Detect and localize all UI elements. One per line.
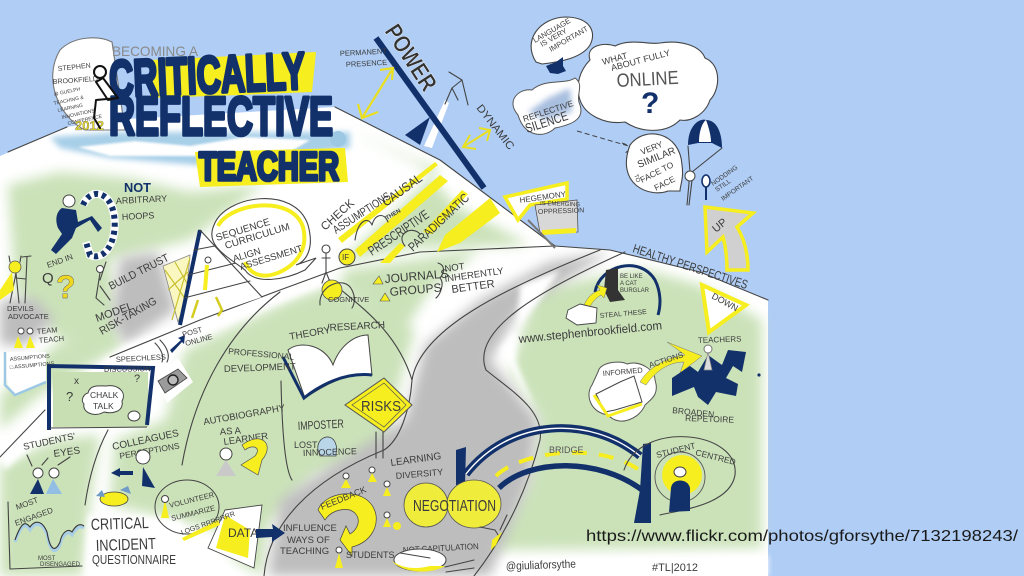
students figure label <box>335 547 395 568</box>
bulbs <box>355 216 420 246</box>
scaffold <box>163 230 262 325</box>
group heads <box>96 486 131 497</box>
body <box>96 262 110 305</box>
text: TEAM <box>36 325 58 336</box>
burglar <box>604 268 625 302</box>
book <box>288 335 372 398</box>
text: hoops: HOOPS <box>122 210 155 222</box>
title word: teacher: TEACHER <box>199 145 339 189</box>
text: actions: ACTIONS <box>648 350 684 370</box>
white hill base <box>0 107 768 576</box>
risks sign <box>345 378 412 458</box>
text: bridge: BRIDGE <box>549 445 584 455</box>
seesaw beam <box>376 38 484 188</box>
critical incident questionnaire: CRITICAL <box>91 515 149 534</box>
speechless discussion: DISCUSSION <box>104 364 151 374</box>
q letter: Q <box>42 270 54 287</box>
text <box>36 325 64 345</box>
critical incident questionnaire: INCIDENT <box>96 536 156 555</box>
text: causal: CAUSAL <box>379 170 425 209</box>
figure head <box>136 450 150 464</box>
landscape outlines <box>0 107 768 576</box>
text: conference: CONFERENCE <box>67 114 103 127</box>
text: nodding <box>710 164 755 203</box>
text: COGNITIVE <box>328 295 369 304</box>
power seesaw <box>340 20 516 188</box>
figure body <box>216 460 236 476</box>
text: curriculum: CURRICULUM <box>224 222 291 252</box>
student figures on the road <box>341 467 401 530</box>
text: dynamic: DYNAMIC <box>474 102 516 152</box>
white road edge <box>0 270 768 576</box>
figure 2 head <box>49 468 59 478</box>
reflective silence cloud <box>513 78 581 136</box>
text: not inherently better: BETTER <box>451 278 495 296</box>
learning diversity <box>390 451 444 481</box>
yellow ring <box>218 205 304 276</box>
text: broaden: BROADEN <box>672 405 715 419</box>
arch <box>320 283 354 308</box>
nodding figure <box>705 178 707 200</box>
post online <box>155 325 214 362</box>
online cloud <box>578 42 718 130</box>
sign text: RISKS <box>361 398 401 415</box>
dashed arrow <box>577 131 633 154</box>
text: online: ONLINE <box>616 68 679 92</box>
text: perceptions: PERCEPTIONS <box>119 440 181 461</box>
text: lost: LOST <box>294 440 318 450</box>
professional development: PROFESSIONAL <box>228 346 295 362</box>
text: website: www.stephenbrookfield.com <box>517 318 663 346</box>
if label: IF <box>342 253 349 262</box>
text: student: STUDENT <box>655 441 696 460</box>
small title line: BECOMING A <box>112 43 199 59</box>
language bubble <box>531 16 593 74</box>
scaffold body <box>163 255 190 322</box>
autobiography: AUTOBIOGRAPHY <box>203 403 287 428</box>
text: innocence: INNOCENCE <box>303 446 357 458</box>
theory research book <box>283 320 385 398</box>
parachute <box>685 120 755 205</box>
journals groups <box>373 261 505 301</box>
text <box>181 325 214 348</box>
text: IMPORTANT <box>548 24 590 54</box>
text: if <box>339 249 355 265</box>
theory research book: THEORY <box>289 325 332 343</box>
text: not inherently better <box>444 261 505 296</box>
bracket <box>436 263 444 298</box>
text: model: MODEL <box>94 300 135 325</box>
text: assumptions 2: □ ASSUMPTIONS <box>10 361 55 371</box>
word: power: POWER <box>379 20 442 96</box>
chalk cloud <box>82 386 123 414</box>
figure <box>669 480 690 512</box>
text: sequence: SEQUENCE <box>215 217 272 244</box>
influence text <box>280 523 337 557</box>
text: be like a cat burglar: BE LIKE <box>620 274 643 280</box>
text: up: UP <box>710 216 730 235</box>
climber <box>205 257 211 263</box>
text: oppression: OPPRESSION <box>538 207 584 216</box>
devils advocate <box>0 256 49 321</box>
text: what about fully: ABOUT FULLY <box>610 48 671 73</box>
question mark: ? <box>56 269 76 305</box>
yellow sheet <box>216 515 250 558</box>
text: research: /RESEARCH <box>327 320 385 334</box>
mark 2: ? <box>134 373 140 385</box>
text: be like a cat burglar: BURGLAR <box>620 288 650 294</box>
figure <box>161 500 169 518</box>
volunteer summarize <box>155 480 236 541</box>
title yellow highlights <box>150 52 348 187</box>
text: informed: INFORMED <box>602 365 644 378</box>
text: check assumptions: CHECK <box>319 197 357 233</box>
yellow arrow <box>241 439 267 475</box>
text: nodding: NODDING <box>710 164 739 188</box>
frame lines <box>184 230 262 298</box>
students figure label: STUDENTS <box>346 550 395 560</box>
text: VERY <box>639 139 664 157</box>
camera body <box>158 369 187 393</box>
icons <box>373 276 390 301</box>
figure head <box>220 448 232 460</box>
text: SILENCE <box>523 108 570 136</box>
book <box>596 376 642 412</box>
bridge <box>456 428 651 523</box>
icon figure <box>318 437 337 456</box>
text: not: NOT <box>124 180 151 195</box>
text: build trust: BUILD TRUST <box>107 252 171 293</box>
right post <box>634 443 651 523</box>
influence text: INFLUENCE <box>283 523 337 534</box>
text: REFLECTIVE <box>522 98 575 124</box>
colleagues perceptions <box>96 428 181 506</box>
text: risk-taking: RISK-TAKING <box>98 295 159 338</box>
text: IS VERY <box>538 26 569 49</box>
yellow dashes <box>496 453 642 476</box>
line 2: DIVERSITY <box>395 467 444 481</box>
text <box>532 16 590 54</box>
influence text: TEACHING <box>280 546 329 557</box>
lower arc <box>499 466 642 490</box>
hoop white band <box>83 194 115 256</box>
chalk talk board <box>49 366 153 430</box>
icon: question mark: ? <box>641 87 659 120</box>
text: check assumptions <box>319 190 393 237</box>
text: nodding: IMPORTANT <box>720 175 755 203</box>
text: chalk talk <box>90 390 119 411</box>
camera <box>155 358 193 403</box>
cape <box>0 272 14 300</box>
sitting figure on title <box>94 66 118 128</box>
speechless discussion <box>104 352 166 374</box>
down arrow <box>702 285 746 332</box>
speechless discussion: SPEECHLESS <box>116 352 166 364</box>
stick figure <box>445 72 468 105</box>
text: volunteer: VOLUNTEER <box>168 490 216 510</box>
bodies <box>14 336 35 348</box>
learning diversity: LEARNING <box>390 451 442 469</box>
text: permanent: PERMANENT <box>340 47 388 58</box>
scaffold bracing <box>165 258 190 320</box>
text: year: 2012 <box>75 118 104 133</box>
text: speaker name: STEPHEN <box>57 63 91 73</box>
navy arc <box>595 266 660 315</box>
navy arrows <box>672 350 746 405</box>
negotiation bubble <box>404 480 507 550</box>
students eyes <box>22 431 81 494</box>
arrow: dynamic <box>463 128 490 149</box>
left post <box>456 447 466 485</box>
text: down: DOWN <box>710 291 740 313</box>
signal arcs <box>155 340 168 362</box>
critical incident questionnaire <box>91 515 176 567</box>
boat hull <box>392 561 445 572</box>
credit handle: @giuliaforsythe <box>506 559 576 573</box>
critical incident questionnaire: QUESTIONNAIRE <box>92 552 176 567</box>
fulcrum <box>405 117 430 145</box>
text: LANGUAGE <box>532 16 572 45</box>
sign pole <box>528 220 555 248</box>
end in q: END IN <box>46 252 74 270</box>
autobiography: AS A <box>219 425 242 438</box>
figure 1 body <box>30 479 44 494</box>
arrow <box>111 468 133 477</box>
text: not inherently better: NOT <box>444 261 465 275</box>
text: emerging: IS EMERGING <box>540 201 580 208</box>
text: steal these: STEAL THESE <box>600 309 647 320</box>
text: teachers: TEACHERS <box>698 334 742 345</box>
text: most engaged: MOST <box>15 495 40 512</box>
engagement chart <box>8 495 84 569</box>
not capitulation: NOT CAPITULATION <box>403 541 479 555</box>
text: be like a cat burglar <box>620 274 650 294</box>
professional development <box>224 346 296 375</box>
text: align: ALIGN <box>232 246 262 265</box>
cognitive <box>320 280 369 308</box>
figures <box>33 468 43 478</box>
text: chalk talk: TALK <box>93 401 114 411</box>
imposter <box>294 417 357 458</box>
teacher figure <box>704 352 712 370</box>
text: FACE TO <box>638 159 675 185</box>
text: assessment: ASSESSMENT <box>239 243 304 273</box>
mark 3: x <box>74 376 79 387</box>
papers <box>566 304 597 325</box>
figure 2 body <box>46 479 62 494</box>
text: assumptions: ASSUMPTIONS <box>10 353 50 363</box>
text: prescriptive: PRESCRIPTIVE <box>365 207 432 258</box>
text: ONLINE <box>184 332 214 348</box>
imposter: IMPOSTER <box>297 417 344 433</box>
text: most disengaged: MOST <box>38 556 56 562</box>
text <box>7 304 49 321</box>
text <box>632 139 677 193</box>
up arrow <box>705 207 753 270</box>
text: healthy perspectives: HEALTHY PERSPECTIVES <box>631 242 750 292</box>
text: most disengaged <box>38 556 81 568</box>
text: not inherently better: INHERENTLY <box>444 266 505 285</box>
text: groups: GROUPS <box>389 281 442 299</box>
camera lens <box>168 375 178 385</box>
text: feedback: FEEDBACK <box>319 484 368 512</box>
text: repertoire: REPETOIRE <box>685 413 735 425</box>
runner and hoop <box>51 180 167 256</box>
autobiography <box>203 403 287 476</box>
students eyes: STUDENTS' <box>22 431 77 453</box>
build trust and model risk taking <box>94 252 171 338</box>
end in q <box>42 252 76 305</box>
data arrow <box>256 524 285 542</box>
figure body <box>142 467 155 488</box>
boat <box>394 549 446 571</box>
green landscape washes <box>0 130 762 576</box>
text: summarize: SUMMARIZE <box>170 503 216 523</box>
text: then: THEN <box>385 208 402 222</box>
student centred <box>624 437 737 515</box>
title word: critically: CRITICALLY <box>108 42 306 109</box>
grey road <box>0 252 610 576</box>
not capitulation <box>392 541 479 572</box>
team teach <box>14 325 64 348</box>
speaker circle <box>53 38 125 133</box>
post <box>376 432 383 458</box>
url caption: https://www.flickr.com/photos/gforsythe/7132198243/ <box>586 528 1019 545</box>
colleagues perceptions: COLLEAGUES <box>111 428 180 453</box>
icon: bird <box>546 57 566 74</box>
professional development: DEVELOPMENT <box>224 361 296 375</box>
text: SIMILAR <box>636 146 677 171</box>
text: arbitrary: ARBITRARY <box>116 193 167 206</box>
small cloud <box>128 411 140 421</box>
highlight <box>182 520 220 541</box>
climber body <box>203 265 209 290</box>
title word: reflective: REFLECTIVE <box>109 85 333 147</box>
text: TO <box>632 174 641 184</box>
blue edge <box>5 352 46 395</box>
text: DEVILS <box>7 304 34 313</box>
text: conference: LEARNING <box>57 103 84 114</box>
text: surname: BROOKFIELD <box>53 76 98 86</box>
credit hashtag: #TL|2012 <box>652 562 698 574</box>
text: most engaged: ENGAGED <box>14 506 54 528</box>
text: negotiation: NEGOTIATION <box>413 498 496 515</box>
journals groups: JOURNALS <box>384 266 449 286</box>
text: ADVOCATE <box>8 312 49 321</box>
actions arrow <box>640 342 702 385</box>
yellow arrow <box>584 285 607 307</box>
burglar website section <box>517 266 663 346</box>
group table <box>100 492 128 506</box>
horns and trident <box>9 256 31 303</box>
striped hoop <box>83 194 115 256</box>
influence text: WAYS OF <box>287 535 330 546</box>
assumptions notepad <box>5 352 55 396</box>
text: chalk talk: CHALK <box>90 390 119 400</box>
arrow: presence <box>358 68 393 118</box>
text: data: DATA <box>228 526 258 540</box>
assumption bands <box>319 162 500 265</box>
text: eyes: EYES <box>53 445 81 460</box>
text: TEACH <box>38 334 64 345</box>
text: nodding: STILL <box>714 178 733 194</box>
book navy edge <box>283 357 372 398</box>
water under the title <box>50 131 350 165</box>
text: FACE <box>652 174 677 193</box>
autobiography: LEARNER <box>223 431 269 448</box>
text: centred: CENTRED <box>695 447 737 467</box>
text: what about fully: WHAT <box>601 50 629 67</box>
text: be like a cat burglar: A CAT <box>620 281 637 287</box>
title <box>108 42 339 189</box>
text: POST <box>181 325 204 339</box>
engagement line <box>15 522 84 548</box>
hegemony sign <box>505 183 584 248</box>
book underline <box>594 395 642 416</box>
lower climbers <box>192 297 222 318</box>
head <box>674 467 686 477</box>
runner <box>51 208 102 254</box>
text: most engaged <box>14 495 54 528</box>
inner border <box>352 383 406 427</box>
text: hegemony: HEGEMONY <box>519 189 567 205</box>
text: logs: LOGS RRRRRRR <box>180 511 236 537</box>
navy a-frame <box>180 230 200 325</box>
data papers <box>208 505 262 568</box>
marks: ? <box>66 389 73 404</box>
text: most disengaged: DISENGAGED <box>40 562 81 568</box>
text: conference <box>53 86 103 127</box>
paddle lines <box>400 553 474 572</box>
upper arc highlight <box>466 428 640 474</box>
text: presence: PRESENCE <box>346 58 387 69</box>
dot <box>757 373 761 377</box>
text: conference: INNOVATIONS <box>61 108 96 121</box>
feedback arrow <box>318 484 376 556</box>
text: conference: TEACHING & <box>53 95 85 107</box>
informed cloud <box>589 362 656 421</box>
broaden repertoire <box>672 334 761 425</box>
text: check assumptions: ASSUMPTIONS <box>331 190 393 237</box>
similar bubble <box>626 134 683 193</box>
text: conference: @ GUELPH <box>53 86 81 98</box>
standing figure <box>322 245 330 283</box>
text: paradigmatic: PARADIGMATIC <box>405 191 472 254</box>
sight beams <box>27 455 70 466</box>
figure <box>480 515 507 548</box>
upper arc <box>466 428 640 474</box>
sequence curriculum speech bubble <box>212 199 316 279</box>
